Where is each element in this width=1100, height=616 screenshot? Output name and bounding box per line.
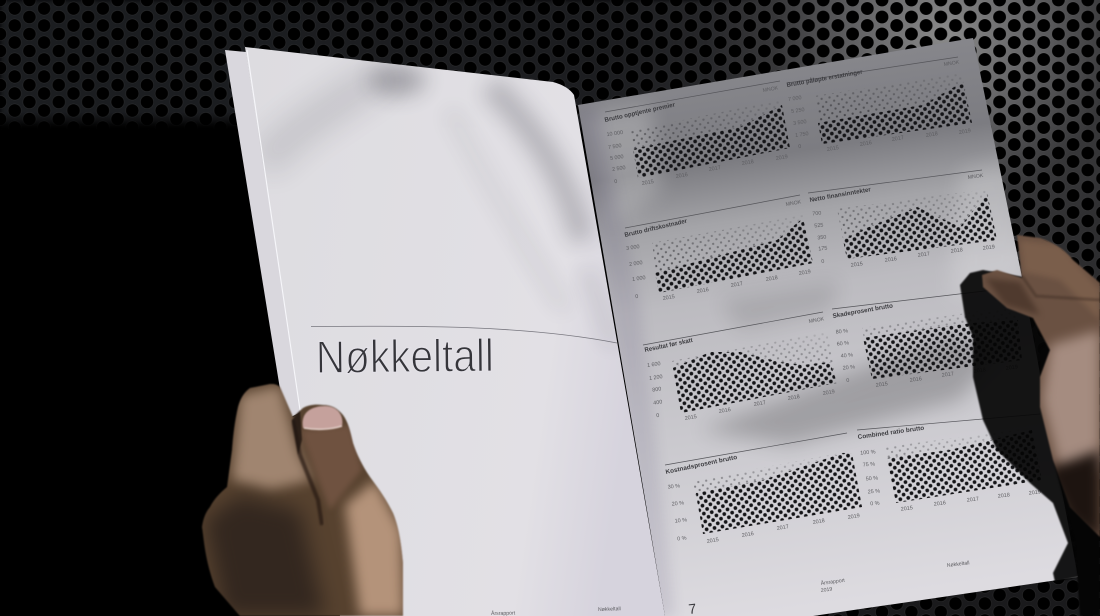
chart: Brutto opptjente premier: 2016	[675, 172, 688, 180]
chart: Brutto påløpte erstatninger: Brutto påløpte erstatninger	[786, 68, 864, 89]
chart: Resultat før skatt: 2016	[718, 407, 731, 415]
chart: Brutto opptjente premier: 5 000	[610, 154, 624, 162]
chart: Netto finansinntekter: 700	[812, 211, 822, 217]
chart: Kostnadsprosent brutto: 2015	[706, 537, 719, 545]
left hand	[202, 384, 404, 616]
chart: Brutto driftskostnader: 2016	[696, 287, 709, 295]
chart: Brutto påløpte erstatninger	[786, 57, 972, 153]
chart: Netto finansinntekter: MNOK	[967, 173, 984, 181]
chart: Skadeprosent brutto: 60 %	[836, 340, 850, 348]
right hand	[982, 235, 1100, 616]
chart: Combined ratio brutto: 25 %	[868, 488, 880, 496]
chart: Brutto påløpte erstatninger: 2017	[891, 135, 904, 143]
chart: Brutto driftskostnader: 2017	[730, 281, 743, 289]
thumbnail	[303, 406, 342, 429]
page edge crease	[247, 50, 300, 410]
chart: Brutto opptjente premier: 7 500	[608, 143, 622, 151]
black lower-left darkness	[0, 112, 300, 130]
chart: Resultat før skatt: 1 600	[647, 361, 661, 369]
chart: Kostnadsprosent brutto	[665, 433, 862, 545]
chart: Brutto driftskostnader: 2018	[765, 275, 778, 283]
chart: Brutto opptjente premier: 2019	[775, 154, 788, 162]
chart: Combined ratio brutto: 0 %	[870, 501, 880, 507]
chart: Brutto opptjente premier: Brutto opptjente premier	[604, 101, 676, 124]
chart: Resultat før skatt: 800	[652, 386, 662, 394]
chart: Brutto påløpte erstatninger: 0	[798, 144, 802, 150]
chart: Brutto påløpte erstatninger: 7 000	[788, 95, 802, 103]
left page footer	[491, 606, 621, 616]
right page	[578, 38, 1090, 616]
right page footer	[688, 560, 970, 616]
chart: Brutto driftskostnader: Brutto driftskostnader	[624, 218, 688, 239]
chart: Resultat før skatt: 0	[656, 413, 660, 419]
chart: Combined ratio brutto: 2015	[901, 505, 913, 513]
chart: Combined ratio brutto: Combined ratio brutto	[857, 425, 925, 441]
left page footer: Nøkkeltall	[598, 606, 621, 613]
right page footer: Nøkkeltall	[947, 560, 970, 569]
chart: Kostnadsprosent brutto: 20 %	[671, 500, 685, 508]
chart: Resultat før skatt: 400	[653, 399, 663, 407]
chart: Kostnadsprosent brutto: 10 %	[674, 517, 688, 525]
chart: Brutto driftskostnader: 0	[635, 294, 639, 300]
chart: Kostnadsprosent brutto: 0 %	[677, 536, 687, 542]
hand shading	[985, 240, 1100, 540]
chart: Skadeprosent brutto: 2015	[876, 381, 888, 389]
chart: Resultat før skatt: 2015	[684, 414, 697, 422]
chart: Skadeprosent brutto: 40 %	[840, 352, 854, 360]
chart: Brutto påløpte erstatninger: 5 250	[791, 107, 805, 115]
chart: Brutto driftskostnader: 3 000	[626, 244, 640, 252]
chart: Combined ratio brutto: 2019	[1029, 489, 1041, 497]
chart: Brutto opptjente premier: 2015	[641, 179, 654, 187]
chart: Skadeprosent brutto: 20 %	[842, 364, 856, 372]
hand shading	[205, 385, 404, 616]
chart: Netto finansinntekter: 2017	[918, 251, 930, 259]
chart: Brutto påløpte erstatninger: MNOK	[943, 60, 960, 68]
chart: Skadeprosent brutto: 2019	[1006, 364, 1018, 372]
title: Nøkkeltall	[316, 329, 494, 383]
chart: Brutto driftskostnader	[624, 195, 813, 302]
chart: Skadeprosent brutto: 2018	[974, 367, 986, 375]
chart: Brutto opptjente premier	[604, 81, 790, 187]
chart: Combined ratio brutto	[857, 414, 1042, 513]
chart: Resultat før skatt: 2017	[753, 400, 766, 408]
chart: Combined ratio brutto: 50 %	[866, 475, 878, 483]
chart: Brutto driftskostnader: 2015	[662, 294, 675, 302]
chart: Kostnadsprosent brutto: 2019	[847, 513, 860, 521]
chart: Brutto påløpte erstatninger: 2015	[826, 145, 839, 153]
chart: Kostnadsprosent brutto: Kostnadsprosent brutto	[665, 454, 738, 476]
chart: Brutto opptjente premier: 2 500	[612, 165, 626, 173]
chart: Combined ratio brutto: 100 %	[860, 449, 876, 457]
nail edge	[304, 426, 342, 429]
chart: Brutto driftskostnader: 1 000	[632, 275, 646, 283]
chart: Combined ratio brutto: 2017	[967, 496, 979, 504]
chart: Netto finansinntekter: Netto finansinntekter	[809, 186, 872, 204]
chart: Brutto opptjente premier: 10 000	[606, 130, 623, 138]
right page footer: Årsrapport	[820, 577, 846, 587]
right page footer: 2019	[820, 586, 833, 594]
chart: Brutto påløpte erstatninger: 3 500	[793, 119, 807, 127]
chart: Kostnadsprosent brutto: 2017	[776, 524, 789, 532]
chart: Netto finansinntekter: 350	[817, 235, 827, 241]
chart: Resultat før skatt	[643, 312, 837, 422]
chart: Brutto driftskostnader: 2 000	[629, 260, 643, 268]
chart: Netto finansinntekter: 525	[814, 223, 824, 229]
chart: Brutto driftskostnader: MNOK	[785, 199, 802, 208]
heading divider rule	[311, 326, 617, 343]
chart: Netto finansinntekter: 2018	[951, 247, 963, 255]
right page light and shadow bands	[578, 105, 1030, 616]
chart: Combined ratio brutto: 2018	[998, 492, 1010, 500]
chart: Resultat før skatt: 1 200	[649, 374, 663, 382]
chart: Brutto opptjente premier: 2018	[741, 159, 754, 167]
chart: Netto finansinntekter: 2016	[885, 256, 897, 264]
chart: Resultat før skatt: MNOK	[808, 316, 825, 325]
chart: Netto finansinntekter	[808, 170, 997, 269]
chart: Brutto påløpte erstatninger: 2018	[925, 131, 938, 139]
chart: Netto finansinntekter: 2015	[851, 261, 863, 269]
left under-sheet edge	[225, 50, 301, 420]
chart: Skadeprosent brutto: 0	[846, 378, 850, 384]
left page	[245, 47, 665, 616]
chart: Netto finansinntekter: 0	[821, 259, 825, 265]
chart: Kostnadsprosent brutto: 2018	[812, 518, 825, 526]
chart: Netto finansinntekter: 175	[818, 246, 828, 252]
chart: Resultat før skatt: Resultat før skatt	[644, 337, 694, 354]
chart: Netto finansinntekter: 2019	[983, 244, 995, 252]
chart: Brutto påløpte erstatninger: 1 750	[795, 131, 809, 139]
chart: Skadeprosent brutto: Skadeprosent brutto	[832, 302, 894, 320]
chart: Kostnadsprosent brutto: 2016	[741, 531, 754, 539]
chart: Brutto påløpte erstatninger: 2016	[859, 140, 872, 148]
chart: Resultat før skatt: 2019	[822, 389, 835, 397]
chart: Skadeprosent brutto: 80 %	[835, 328, 849, 336]
chart: Brutto driftskostnader: 2019	[798, 269, 811, 277]
chart: Skadeprosent brutto: 2016	[910, 376, 922, 384]
chart: Combined ratio brutto: 2016	[934, 500, 946, 508]
chart: Skadeprosent brutto: 2017	[942, 371, 954, 379]
chart: Brutto påløpte erstatninger: 2019	[958, 128, 971, 136]
chart: Skadeprosent brutto	[832, 288, 1022, 389]
chart: Kostnadsprosent brutto: 30 %	[667, 483, 681, 491]
chart: Brutto opptjente premier: 0	[614, 179, 618, 185]
left page soft shadows	[262, 64, 612, 345]
chart: Combined ratio brutto: 75 %	[863, 461, 875, 469]
hand cast shadow on right page	[960, 270, 1090, 582]
chart: Brutto opptjente premier: 2017	[708, 165, 721, 173]
chart: Brutto opptjente premier: MNOK	[762, 85, 779, 94]
chart: Resultat før skatt: 2018	[787, 394, 800, 402]
